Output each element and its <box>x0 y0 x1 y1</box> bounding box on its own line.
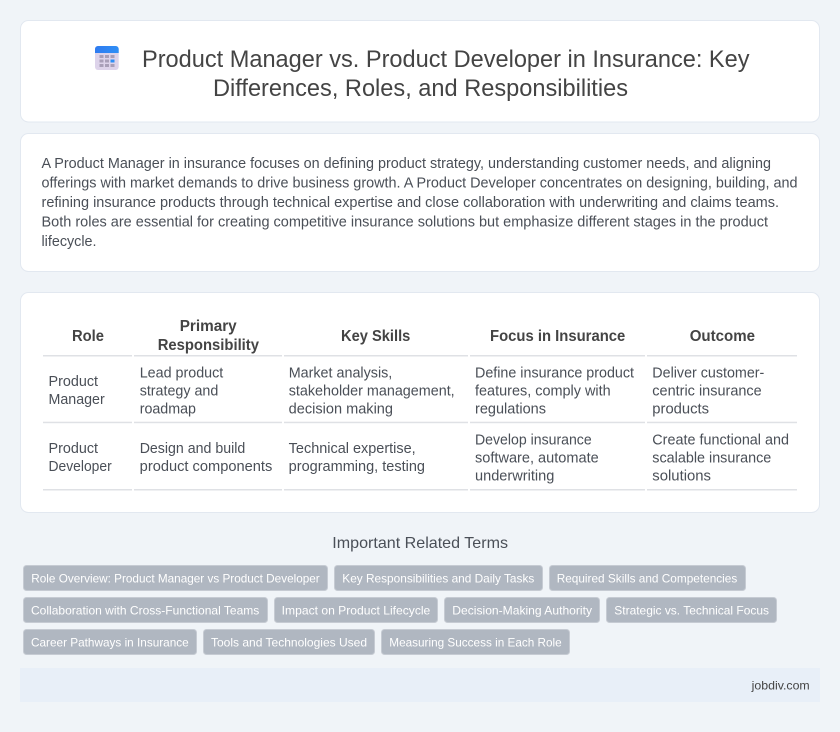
table row: product manager <box>48 366 764 418</box>
table row: product developer: Product <box>48 441 98 457</box>
table row: product developer: scalable insurance <box>652 450 771 466</box>
intro paragraph <box>42 156 798 250</box>
table row: product manager: decision making <box>289 402 393 418</box>
table row: product developer: Create functional and <box>652 432 789 448</box>
icon: calendar <box>95 46 119 70</box>
panel: comparison table <box>20 292 820 512</box>
table header row: Role <box>72 328 104 345</box>
table row: product developer: Technical expertise, <box>289 441 416 457</box>
table row: product developer: solutions <box>652 468 711 484</box>
related term chips: Career Pathways in Insurance <box>31 635 189 649</box>
table row: product developer: software, automate <box>475 450 599 466</box>
table header row: Outcome <box>690 328 755 345</box>
table row: product manager: Manager <box>48 392 105 408</box>
intro paragraph: A Product Manager in insurance focuses on defining product strategy, understanding customer needs, and aligning <box>42 156 771 172</box>
table header row: Key Skills <box>341 328 410 345</box>
table header row: Focus in Insurance <box>490 328 625 345</box>
title: Differences, Roles, and Responsibilities <box>213 75 628 102</box>
related term chips: Collaboration with Cross-Functional Teams <box>31 603 259 617</box>
intro paragraph: offerings with market demands to drive business growth. A Product Developer concentrates on designing, building, and <box>42 176 798 192</box>
related term chips: Role Overview: Product Manager vs Product Developer <box>31 571 320 585</box>
table row: product manager: Lead product <box>140 366 223 382</box>
table row: product developer: Developer <box>48 459 112 475</box>
table row: product developer: underwriting <box>475 468 554 484</box>
intro paragraph: refining insurance products through technical expertise and close collaboration with underwriting and claims teams. <box>42 195 779 211</box>
footer bar <box>20 668 820 702</box>
related term chips: Strategic vs. Technical Focus <box>614 603 769 617</box>
table row: product manager: centric insurance <box>652 384 762 400</box>
table row: product manager: products <box>652 402 709 418</box>
table header row: Responsibility <box>158 337 259 354</box>
title: Product Manager vs. Product Developer in Insurance: Key <box>142 46 750 73</box>
table row: product manager: Product <box>48 374 98 390</box>
related term chips: Measuring Success in Each Role <box>389 635 562 649</box>
related term chips: Tools and Technologies Used <box>211 635 367 649</box>
table row: product developer: Design and build <box>140 441 245 457</box>
table row: product manager: Market analysis, <box>289 366 392 382</box>
related term chips: Required Skills and Competencies <box>557 571 737 585</box>
table row: product developer: product components <box>140 459 272 475</box>
related term chips <box>24 566 776 654</box>
title <box>142 46 750 102</box>
intro paragraph: Both roles are essential for creating competitive insurance solutions but emphasize different stages in the product <box>42 214 768 230</box>
table row: product manager: strategy and <box>140 384 218 400</box>
panel: introduction <box>20 134 820 272</box>
table row: product manager: features, comply with <box>475 384 611 400</box>
table header row: Primary <box>180 318 237 335</box>
related term chips: Impact on Product Lifecycle <box>282 603 431 617</box>
related term chips: Decision-Making Authority <box>452 603 592 617</box>
heading: important related terms: Important Related Terms <box>332 535 508 552</box>
table row: product developer: Develop insurance <box>475 432 592 448</box>
table row: product manager: Deliver customer- <box>652 366 764 382</box>
footer source label: jobdiv.com <box>751 678 810 692</box>
table header row <box>72 318 755 354</box>
panel: title header <box>20 20 820 122</box>
related term chips: Key Responsibilities and Daily Tasks <box>342 571 534 585</box>
table row: product manager: roadmap <box>140 402 196 418</box>
table row: product manager: stakeholder management, <box>289 384 455 400</box>
table row: product developer <box>48 432 789 484</box>
table row: product manager: Define insurance product <box>475 366 634 382</box>
intro paragraph: lifecycle. <box>42 234 96 250</box>
table row: product manager: regulations <box>475 402 546 418</box>
table row: product developer: programming, testing <box>289 459 425 475</box>
